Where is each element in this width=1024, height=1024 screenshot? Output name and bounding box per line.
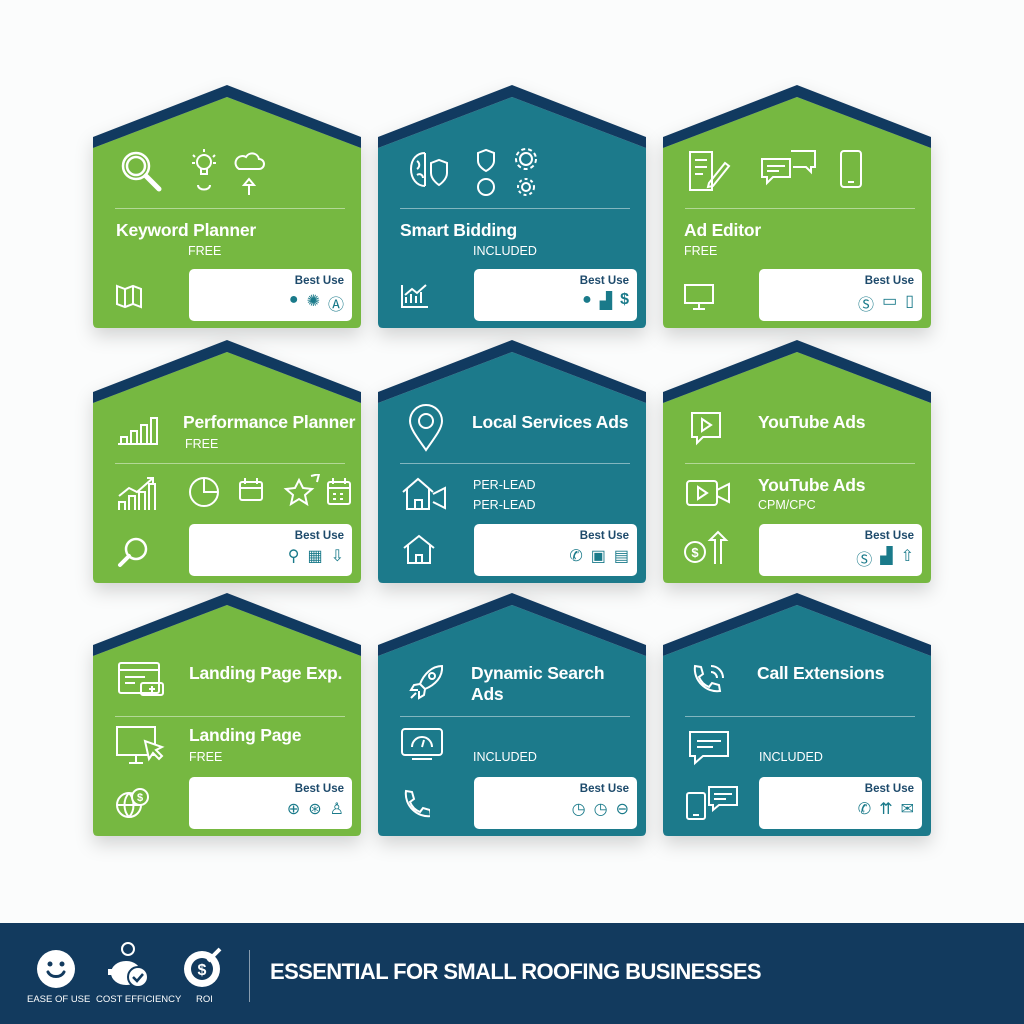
icon: house [403, 534, 435, 564]
best use box: ♙ [330, 801, 344, 818]
card: Smart Bidding: INCLUDED [473, 244, 537, 258]
best use box: Best Use [865, 783, 914, 795]
best use box: ⇧ [901, 548, 914, 565]
title: Ad Editor [684, 220, 761, 240]
best use box: $ [620, 291, 629, 308]
best use box: ⊕ [287, 801, 300, 818]
best use box: Best Use [865, 275, 914, 287]
icon: smiley [37, 950, 75, 988]
icon: document pen [689, 151, 730, 191]
icon: chart [401, 284, 428, 308]
best use box [474, 777, 637, 829]
card: Performance Planner [86, 340, 368, 598]
icon: globe dollar: $ [137, 792, 143, 804]
icon: phone call [694, 664, 724, 692]
icon: cloud upload [234, 152, 265, 195]
icon: phone chat [686, 786, 738, 820]
icon: magnifier [122, 152, 162, 192]
best use box [474, 269, 637, 321]
best use box: ⊛ [308, 801, 322, 818]
best use box [189, 524, 352, 576]
icon: map [116, 284, 142, 308]
footer band: ROI [196, 994, 213, 1005]
icon: rocket [409, 665, 443, 700]
best use box: ✺ [307, 293, 320, 310]
card: Ad Editor [656, 85, 938, 344]
best use box [474, 524, 637, 576]
icon: chat bubbles [761, 150, 816, 186]
icon: browser window [118, 662, 164, 696]
best use box [759, 269, 922, 321]
best use box: ✆ [569, 548, 583, 565]
card: Landing Page Exp. [86, 593, 368, 852]
card: Performance Planner: FREE [185, 437, 218, 451]
best use box: ▣ [591, 548, 606, 565]
best use box [759, 777, 922, 829]
title: Local Services Ads [472, 412, 628, 432]
icon: phone [404, 790, 430, 818]
best use box: ▟ [600, 293, 612, 310]
card: Call Extensions [656, 593, 938, 852]
footer band [0, 923, 1024, 1024]
icon: shields and gears [477, 148, 537, 196]
footer heading: ESSENTIAL FOR SMALL ROOFING BUSINESSES [270, 959, 761, 984]
card: Dynamic Search Ads: INCLUDED [473, 750, 537, 764]
best use box: ✆ [858, 801, 871, 818]
best use box: ◷ [572, 801, 586, 818]
best use box: ◷ [594, 801, 608, 818]
best use box: Best Use [295, 530, 344, 542]
title: Keyword Planner [116, 220, 256, 240]
best use box: ● [289, 291, 299, 308]
best use box: ▯ [905, 293, 914, 310]
footer band: COST EFFICIENCY [96, 994, 181, 1005]
best use box: ⇩ [331, 548, 344, 565]
card: Keyword Planner [86, 85, 368, 344]
icon: dollar up [684, 530, 728, 564]
icon: bars [118, 417, 158, 445]
footer labels: EASE OF USE [27, 994, 90, 1005]
icon: monitor [684, 284, 714, 310]
best use box: ▤ [614, 548, 629, 565]
icon: location pin [409, 404, 443, 452]
best use box: Ⓢ [858, 297, 874, 314]
best use box: ● [582, 291, 592, 308]
card: Keyword Planner: FREE [188, 244, 221, 258]
icon: monitor gauge [401, 728, 443, 760]
title: Smart Bidding [400, 220, 517, 240]
icon: bulb [192, 149, 216, 190]
title: Dynamic Search [471, 663, 604, 683]
icon: piggy bank [106, 941, 154, 991]
best use box: ▟ [880, 548, 893, 565]
best use box: Best Use [295, 275, 344, 287]
icon: magnifier [118, 538, 148, 568]
best use box: ✉ [901, 801, 914, 818]
card: Call Extensions: INCLUDED [759, 750, 823, 764]
card: Dynamic Search Ads [370, 593, 654, 852]
title: Performance Planner [183, 412, 355, 432]
icon: video camera [686, 480, 730, 506]
title: Landing Page Exp. [189, 663, 342, 683]
best use box [759, 524, 922, 576]
best use box: ⚲ [288, 548, 299, 565]
card: Ad Editor: FREE [684, 244, 717, 258]
best use box: Best Use [580, 783, 629, 795]
icon: brain shield [410, 152, 448, 187]
best use box: ▭ [882, 293, 897, 310]
title: Ads [471, 684, 503, 704]
title: Call Extensions [757, 663, 884, 683]
icon: ROI [182, 947, 226, 991]
best use box: Ⓢ [856, 552, 872, 569]
best use box: Best Use [295, 783, 344, 795]
best use box [189, 269, 352, 321]
best use box: Ⓐ [328, 297, 344, 314]
best use box: Best Use [580, 275, 629, 287]
card: YouTube Ads: CPM/CPC [758, 498, 816, 512]
icon row: growth, pie, calendar, star, calendar [118, 474, 351, 510]
icon: ROI: $ [198, 962, 207, 979]
icon: monitor cursor [116, 726, 164, 764]
icon: globe dollar [116, 788, 149, 818]
card: Local Services Ads: PER-LEAD [473, 498, 536, 512]
card: Smart Bidding [370, 85, 654, 344]
card: Local Services Ads [370, 340, 654, 598]
best use box: ⇈ [879, 801, 893, 818]
card: YouTube Ads [656, 340, 938, 598]
best use box [189, 777, 352, 829]
icon: chat [689, 731, 729, 766]
best use box: ⊖ [616, 801, 629, 818]
best use box: Best Use [865, 530, 914, 542]
icon: house camera [402, 478, 446, 510]
best use box: Best Use [580, 530, 629, 542]
title: YouTube Ads [758, 412, 865, 432]
icon: dollar up: $ [691, 545, 699, 560]
card: Landing Page Exp.: FREE [189, 750, 222, 764]
subtitle: YouTube Ads [758, 475, 865, 495]
icon: phone [840, 150, 862, 188]
icon: play bubble [691, 412, 721, 446]
best use box: ▦ [307, 548, 323, 565]
card: Local Services Ads: PER-LEAD [473, 478, 536, 492]
title [471, 663, 604, 704]
card: Landing Page Exp.: Landing Page [189, 725, 301, 745]
